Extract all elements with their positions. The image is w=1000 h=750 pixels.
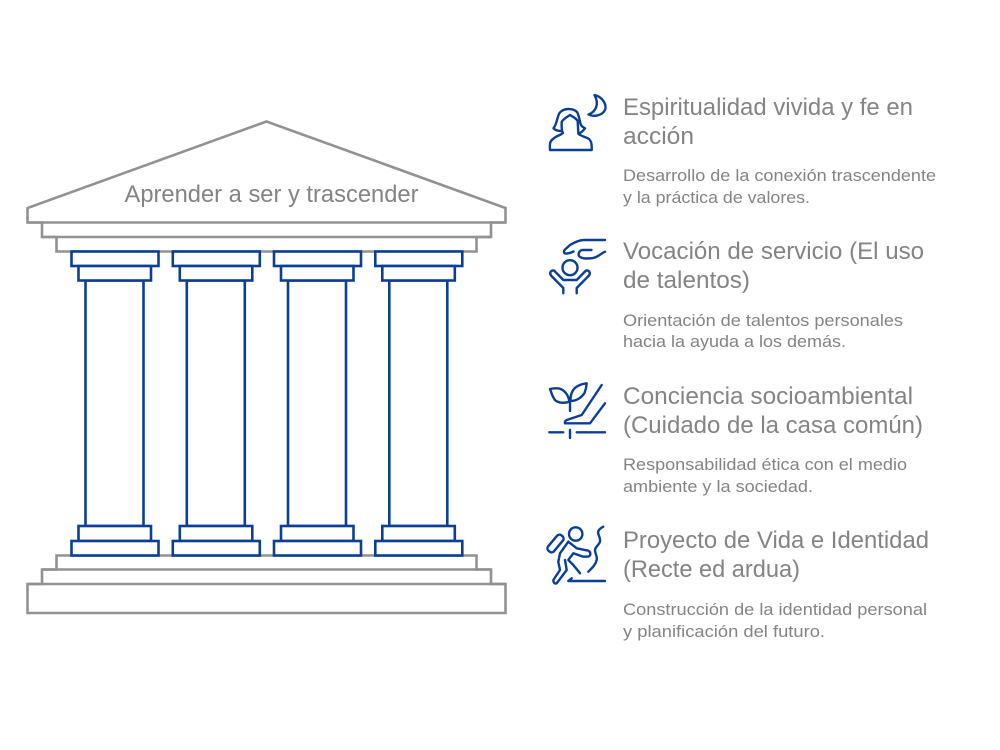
- item 1: Espiritualidad: [550, 94, 936, 207]
- description: Orientación de talentos personales: [623, 312, 903, 330]
- item 1: Espiritualidad: acción: [623, 123, 694, 150]
- temple roof: [28, 122, 506, 252]
- icon: climber: [546, 527, 605, 584]
- heading: Proyecto de Vida e Identidad: [623, 527, 929, 554]
- item 3: Conciencia: (Cuidado de la casa común): [623, 412, 923, 439]
- column 4: [375, 252, 462, 556]
- item 2: Vocación: hacia la ayuda a los demás.: [623, 333, 846, 351]
- description: Responsabilidad ética con el medio: [623, 456, 907, 474]
- column 3: [274, 252, 361, 556]
- column 1: [72, 252, 158, 556]
- heading: Conciencia socioambiental: [623, 383, 913, 410]
- icon: person and moon: [550, 95, 606, 150]
- roof label: Aprender a ser y trascender: [124, 181, 418, 208]
- item 1: Espiritualidad: y la práctica de valores.: [623, 189, 810, 207]
- temple base: [28, 556, 506, 613]
- item 2: Vocación: de talentos): [623, 267, 750, 294]
- icon: plant and hand: [549, 383, 605, 438]
- item 4: Proyecto: (Recte ed ardua): [623, 556, 800, 583]
- item 4: Proyecto: y planificación del futuro.: [623, 623, 825, 641]
- heading: Vocación de servicio (El uso: [623, 238, 924, 265]
- description: Desarrollo de la conexión trascendente: [623, 167, 936, 185]
- temple: [28, 122, 506, 613]
- column 2: [173, 252, 260, 556]
- item 4: Proyecto: [546, 527, 929, 641]
- heading: Espiritualidad vivida y fe en: [623, 94, 913, 121]
- icon: hand over person: [550, 240, 605, 293]
- item 3: Conciencia: [549, 383, 923, 496]
- item 3: Conciencia: ambiente y la sociedad.: [623, 478, 813, 496]
- item 2: Vocación: [550, 238, 924, 351]
- description: Construcción de la identidad personal: [623, 601, 927, 619]
